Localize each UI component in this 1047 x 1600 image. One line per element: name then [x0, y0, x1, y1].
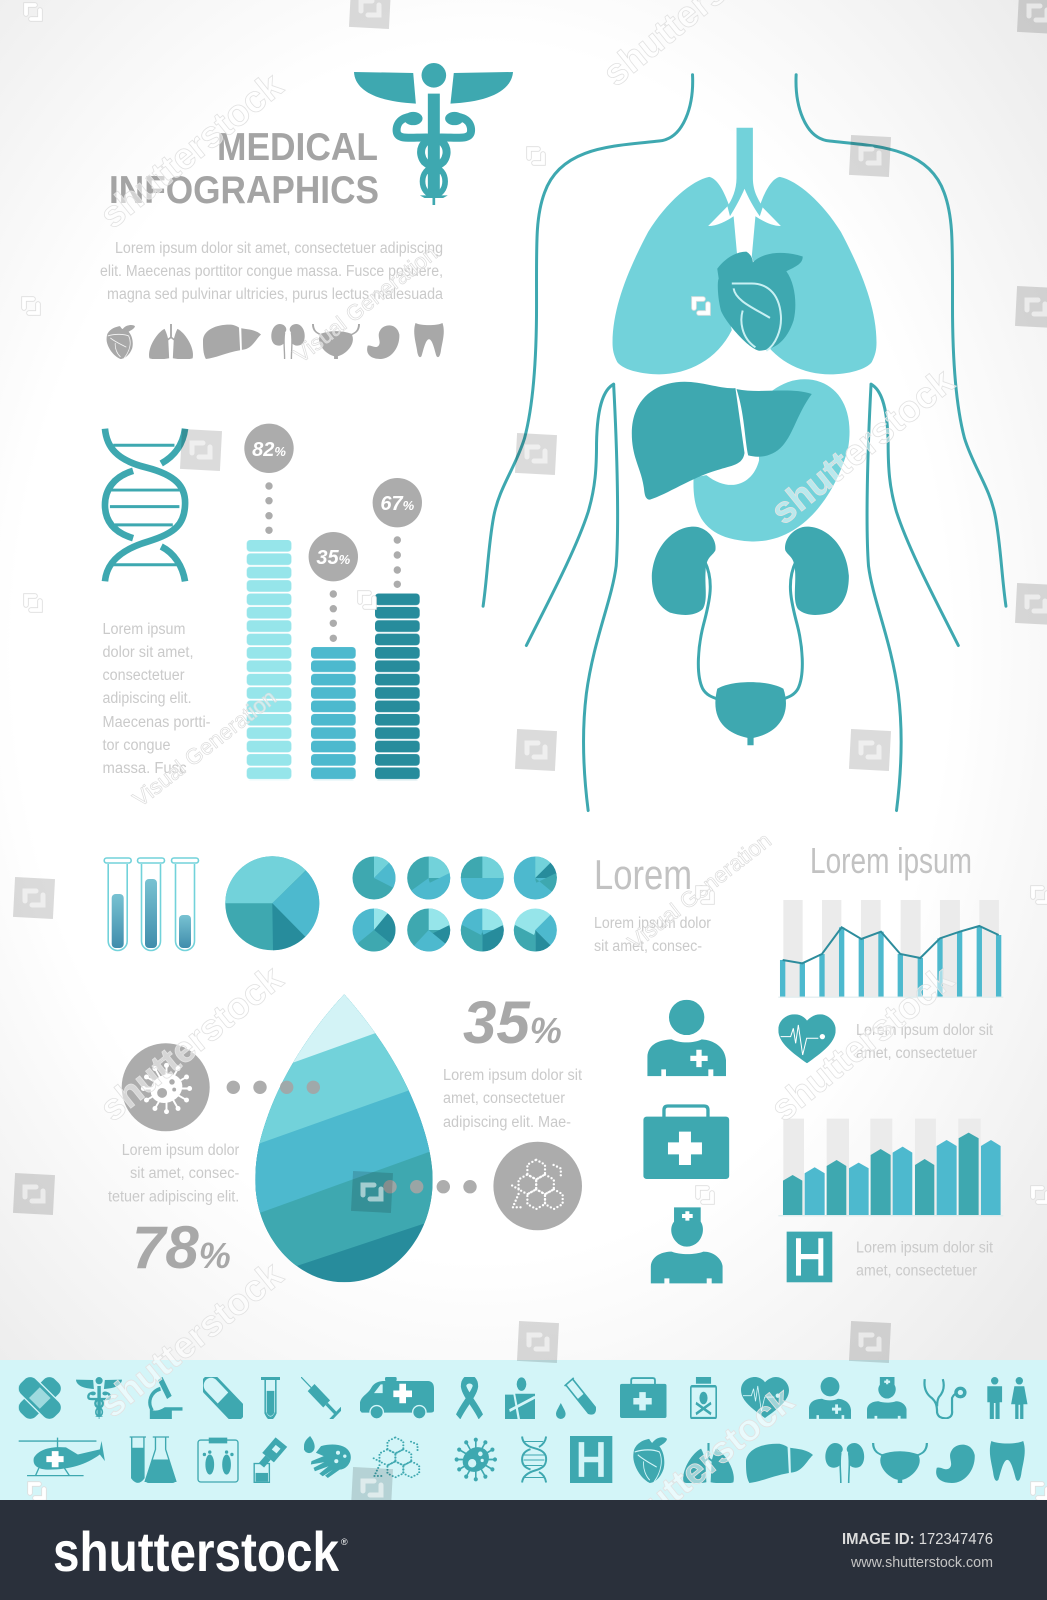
intro paragraph: Lorem ipsum dolor sit amet, consectetuer adipiscing: [115, 240, 443, 257]
pie caption: [594, 915, 711, 955]
band icons row 2: [19, 1436, 1025, 1483]
icon: molecule badge: [493, 1142, 582, 1230]
label 67%: 67%: [380, 493, 415, 515]
icon: liver: [746, 1444, 813, 1483]
icon: DNA: [522, 1436, 546, 1482]
callout text: [443, 1067, 583, 1131]
connector dots: [227, 1081, 320, 1094]
label 82%: 82%: [252, 439, 286, 461]
icon: heart: [633, 1437, 667, 1483]
columns: [783, 1133, 1001, 1215]
stat 78%: 78%: [132, 1214, 231, 1281]
main title: INFOGRAPHICS: [109, 169, 379, 212]
water drop chart: [255, 994, 433, 1282]
icon: bandage: [18, 1377, 61, 1419]
icon: bathroom scale: [197, 1438, 239, 1483]
right callout: [383, 989, 583, 1230]
column chart caption: Lorem ipsum dolor sit: [856, 1240, 994, 1257]
intro paragraph: elit. Maecenas porttitor congue massa. Fusce posuere,: [100, 263, 443, 280]
organ: heart: [717, 252, 803, 351]
footer logo: shutterstock: [53, 1520, 340, 1583]
icon: stethoscope: [923, 1378, 967, 1419]
bars: [780, 926, 1001, 997]
label 82%: [244, 424, 294, 534]
watermark: visual generation: Visual Generation: [623, 828, 776, 955]
icon: doctor: [809, 1377, 851, 1419]
column chart caption: [856, 1240, 994, 1280]
icon: molecule: [510, 1160, 563, 1209]
line chart caption: amet, consectetuer: [856, 1045, 977, 1062]
line: [783, 926, 999, 963]
organ: lungs and trachea: [613, 128, 877, 374]
intro paragraph: magna sed pulvinar ultricies, purus lectus malesuada: [107, 286, 443, 303]
icon: liver: [203, 325, 261, 359]
website: www.shutterstock.com: [850, 1555, 993, 1571]
icon: hand with drop: [304, 1436, 351, 1478]
watermark: visual generation: Visual Generation: [128, 685, 281, 812]
side paragraph: Maecenas portti-: [102, 714, 210, 731]
icon: kidneys: [271, 324, 305, 359]
side paragraph: adipiscing elit.: [102, 690, 192, 707]
main title: [109, 126, 379, 212]
icon: poison bottle: [690, 1377, 717, 1419]
main title: MEDICAL: [217, 126, 378, 169]
pie 8: [514, 908, 557, 952]
tube 3: [172, 858, 198, 951]
footer bar: [0, 1500, 1047, 1600]
organ: stomach: [693, 379, 850, 541]
watermark: visual generation: Visual Generation: [289, 241, 442, 368]
icon: virus badge: [122, 1043, 210, 1131]
icon: bladder: [873, 1443, 927, 1483]
watermark: stock wordmarks: shutterstock: [92, 1253, 291, 1425]
icon: stomach: [936, 1445, 975, 1483]
pie 7: [461, 908, 504, 952]
stat 35%: 35%: [463, 989, 562, 1056]
test tubes: [104, 858, 198, 951]
icon: hospital sign: [570, 1436, 612, 1483]
heading: Lorem ipsum: Lorem ipsum: [810, 840, 972, 881]
organ: bladder: [715, 682, 786, 745]
bar 82%: [247, 540, 291, 781]
tube 1: [104, 858, 131, 951]
icon: nurse: [867, 1377, 907, 1419]
side paragraph: [102, 621, 210, 777]
image id: IMAGE ID: 172347476: [842, 1531, 993, 1548]
callout text: Lorem ipsum dolor: [122, 1142, 239, 1159]
side paragraph: Lorem ipsum: [102, 621, 186, 638]
line chart caption: Lorem ipsum dolor sit: [856, 1022, 994, 1039]
icon: caduceus: [76, 1377, 122, 1419]
icon: ambulance: [360, 1377, 434, 1418]
watermark: stock wordmarks: shutterstock: [92, 957, 291, 1129]
pie 5: [352, 908, 396, 952]
icon: virus: [141, 1063, 192, 1114]
intro paragraph: [100, 240, 443, 303]
pie 3: [461, 856, 504, 900]
heading: Lorem: Lorem: [594, 851, 692, 898]
icon: lungs: [149, 324, 193, 359]
callout text: [108, 1142, 239, 1206]
organ: kidneys and ureters: [652, 527, 849, 700]
pie caption: Lorem ipsum dolor: [594, 915, 711, 932]
icon: first aid kit: [620, 1378, 666, 1418]
line and bar chart: [778, 900, 1003, 998]
icon: DNA helix: [105, 429, 185, 581]
icon: man and woman: [987, 1377, 1028, 1419]
icon: syringe: [301, 1377, 341, 1419]
label 67%: [373, 478, 422, 588]
watermark: visual generation: [128, 241, 776, 955]
icon: doctor: [647, 1000, 726, 1076]
large pie chart: [225, 856, 319, 950]
column chart: [778, 1119, 1003, 1216]
line chart caption: [856, 1022, 994, 1062]
icon: heart with pulse: [741, 1377, 789, 1418]
callout text: tetuer adipiscing elit.: [108, 1189, 239, 1206]
callout text: adipiscing elit. Mae-: [443, 1114, 571, 1131]
watermark: stock wordmarks: shutterstock: [603, 1379, 802, 1551]
small pie charts: [352, 856, 557, 952]
icon: nurse: [651, 1207, 723, 1283]
bar 67%: [375, 594, 420, 781]
icon: stomach: [367, 325, 399, 359]
icon: bladder: [313, 324, 359, 359]
label 35%: 35%: [316, 547, 351, 569]
icon: kidneys: [825, 1443, 864, 1483]
column chart caption: amet, consectetuer: [856, 1263, 977, 1280]
callout text: sit amet, consec-: [130, 1165, 239, 1182]
icon: tube and drop: [556, 1377, 596, 1419]
icon: awareness ribbon: [456, 1377, 483, 1419]
left callout: [108, 1043, 320, 1281]
side paragraph: tor congue: [102, 737, 170, 754]
icon band: [0, 1360, 1047, 1500]
side paragraph: dolor sit amet,: [102, 644, 194, 661]
icon: hospital sign: [787, 1232, 832, 1282]
icon: microscope: [148, 1377, 182, 1419]
watermark: stock wordmarks: shutterstock: [763, 360, 962, 532]
icon: heart: [107, 325, 135, 359]
pie 2: [407, 856, 450, 900]
icon: first aid kit: [643, 1106, 729, 1179]
side paragraph: massa. Fusc: [102, 760, 187, 777]
body outline: [483, 75, 1006, 811]
side paragraph: consectetuer: [102, 667, 184, 684]
icon: tooth: [414, 323, 444, 357]
icon: virus: [455, 1438, 497, 1481]
callout text: amet, consectetuer: [443, 1090, 565, 1107]
icon: tube and flask: [130, 1436, 176, 1483]
icon: caduceus: [354, 63, 513, 205]
label 35%: [309, 532, 358, 642]
watermark: stock wordmarks: shutterstock: [763, 957, 962, 1129]
grey organ icon row: [107, 323, 444, 359]
icon: test tube: [261, 1377, 280, 1419]
organ: liver: [632, 382, 812, 500]
pie 6: [407, 908, 450, 952]
pie 1: [352, 856, 396, 900]
tube 2: [138, 858, 164, 951]
icon: heart with pulse: [778, 1014, 836, 1063]
callout text: Lorem ipsum dolor sit: [443, 1067, 583, 1084]
icon: helicopter: [18, 1438, 105, 1476]
icon: capsule: [203, 1377, 243, 1419]
bar 35%: [311, 647, 356, 781]
band icons row 1: [15, 1371, 1028, 1424]
segmented bar chart: [244, 424, 422, 781]
icon: tooth: [990, 1441, 1025, 1481]
pie 4: [514, 856, 557, 900]
watermark: stock wordmarks: shutterstock: [92, 64, 291, 236]
connector dots: [383, 1180, 477, 1193]
icon: molecule: [372, 1437, 419, 1477]
body diagram: [483, 75, 1006, 811]
pie caption: sit amet, consec-: [594, 938, 702, 955]
icon: lungs: [683, 1443, 734, 1483]
icon: patient with sling: [505, 1377, 535, 1419]
registered mark: ®: [341, 1537, 348, 1547]
icon: bottle and cup: [254, 1437, 288, 1483]
